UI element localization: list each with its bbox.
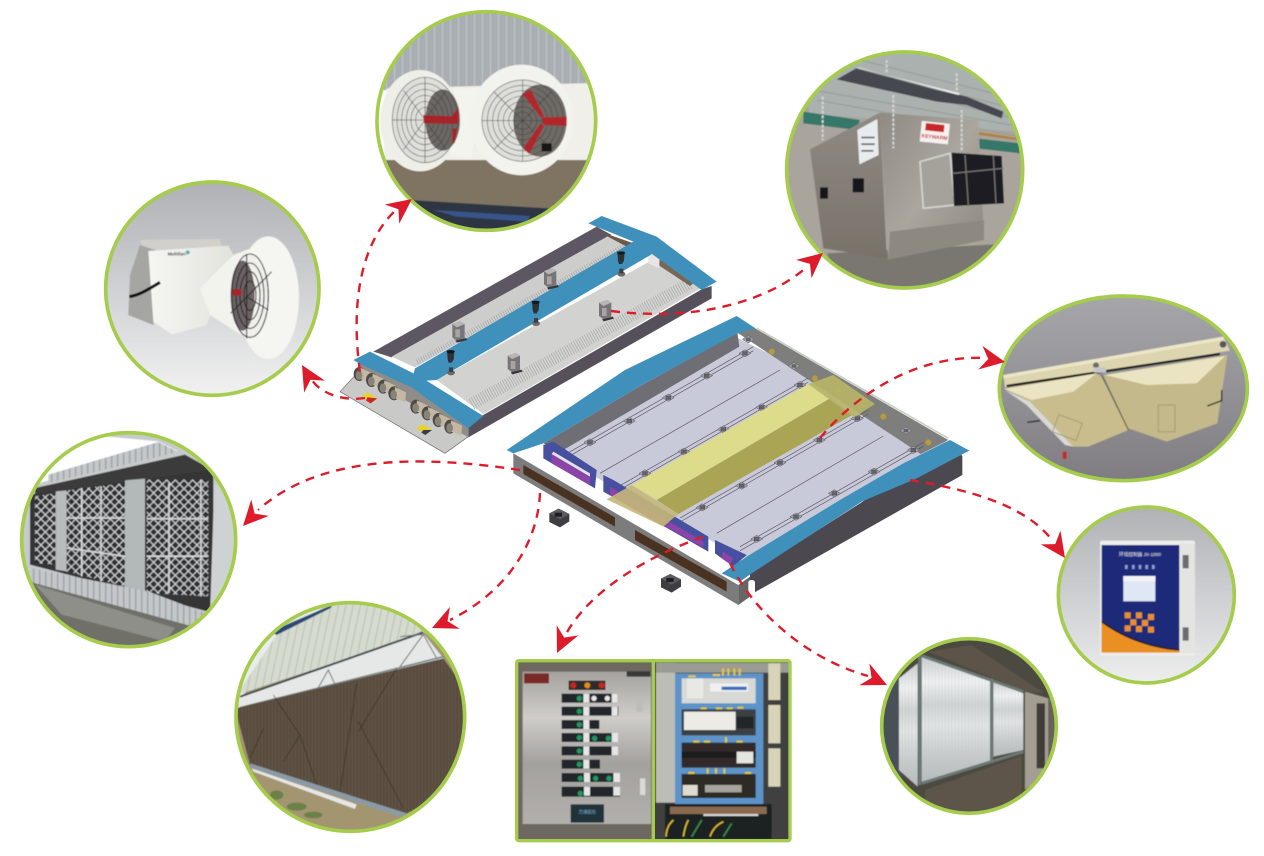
rear wall strip bbox=[373, 227, 612, 357]
arrow: to single fan bbox=[292, 359, 365, 399]
arrow: to air unit bbox=[611, 244, 831, 314]
arrow: to control cabinet bbox=[546, 537, 703, 658]
arrow: to controller bbox=[910, 480, 1075, 565]
left floor panel bbox=[392, 235, 635, 367]
photo circle: polycarbonate windows in corridor bbox=[875, 635, 1065, 815]
front wall with exhaust fans bbox=[354, 363, 468, 437]
photo circle: air inlet windows with lattice guard bbox=[20, 430, 238, 648]
photo ellipse: beige air inlet louvers bbox=[998, 294, 1250, 482]
photo circle: evaporative cooling pad wall bbox=[230, 595, 470, 835]
photo circle: stainless air unit with KEYWARM label bbox=[784, 50, 1024, 290]
left inner wall bbox=[543, 333, 739, 450]
right floor panel bbox=[437, 259, 701, 414]
blue roof frame bbox=[353, 216, 717, 428]
arrow: to twin fans bbox=[357, 189, 419, 372]
air units and fans on the floor bbox=[447, 251, 625, 375]
cooling units under wall bbox=[549, 509, 681, 593]
duct rows and diffusers bbox=[567, 347, 923, 551]
blue and purple inlet frames bbox=[543, 442, 747, 567]
dark side wall bbox=[750, 443, 962, 595]
arrow: to polycarbonate window bbox=[730, 563, 892, 696]
cabinet front: 万通股份 bbox=[579, 808, 597, 815]
cabinet interior bbox=[653, 661, 790, 841]
arrow: to louvers bbox=[820, 346, 1007, 438]
photo circle: twin cone exhaust fans bbox=[375, 10, 598, 232]
photo circle: stainless air unit with KEYWARM label: KEYWARM bbox=[921, 133, 948, 142]
photo circle: controller box: 环境控制器 JX-1000 bbox=[1119, 551, 1161, 558]
blue roof edges bbox=[507, 316, 969, 582]
yellow translucent air duct bbox=[607, 375, 875, 527]
arrow: to inlet window bbox=[234, 461, 520, 534]
interior floor bbox=[543, 338, 947, 558]
green border bbox=[517, 661, 790, 841]
rear inner wall bbox=[737, 328, 948, 454]
rear wall devices bbox=[742, 336, 931, 445]
yellow cooling units bbox=[362, 392, 432, 435]
arrows: dashed red leaders bbox=[234, 189, 1075, 696]
front wall with cooling pad strips bbox=[513, 453, 750, 605]
photo circle: controller box bbox=[1056, 505, 1236, 685]
long side wall bbox=[468, 286, 712, 437]
photo panel: control cabinet front and interior bbox=[517, 661, 790, 841]
cabinet front bbox=[517, 661, 653, 841]
photo circle: white cone fan unit bbox=[100, 175, 327, 402]
photo circle: white cone fan unit: Multifan bbox=[168, 252, 186, 257]
building model: evaporative cooling house (bottom) bbox=[507, 316, 969, 605]
rear opening bbox=[605, 233, 693, 286]
building model: tunnel ventilation house (top) bbox=[340, 216, 717, 453]
arrow: to cooling pad bbox=[427, 493, 540, 639]
ground plate with cooling fans side bbox=[340, 370, 468, 453]
